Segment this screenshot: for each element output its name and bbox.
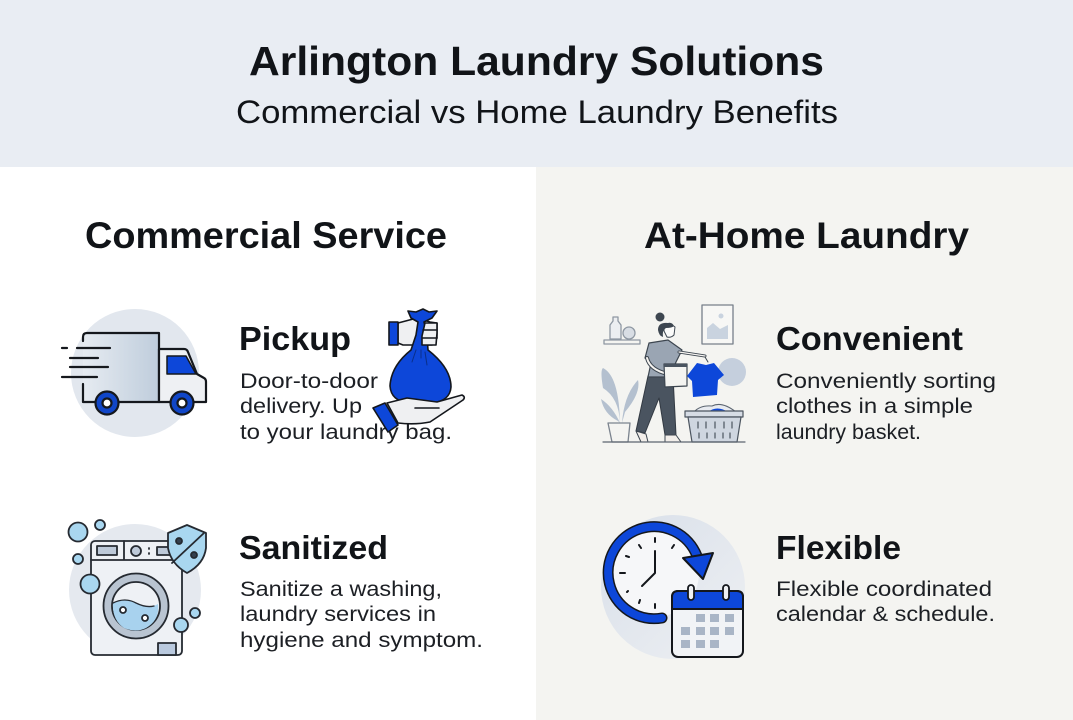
icon: person sorting laundry — [601, 305, 746, 442]
panel: at-home background — [536, 167, 1073, 720]
flexible description: calendar & schedule. — [776, 603, 995, 626]
heading: at-home laundry: At-Home Laundry — [644, 215, 969, 256]
convenient description: clothes in a simple — [776, 395, 973, 418]
flexible description — [776, 578, 995, 626]
text block: pickup — [239, 320, 452, 444]
pickup description: to your laundry bag. — [240, 421, 452, 444]
pickup heading: Pickup — [239, 320, 351, 357]
sanitized description: Sanitize a washing, — [240, 578, 442, 601]
flexible description: Flexible coordinated — [776, 578, 992, 601]
icon: washing machine with shield — [68, 520, 206, 656]
pickup description: Door-to-door — [240, 370, 378, 393]
sanitized description: laundry services in — [240, 603, 436, 626]
flexible heading: Flexible — [776, 529, 901, 566]
text block: convenient — [776, 320, 996, 444]
subtitle: Commercial vs Home Laundry Benefits — [236, 94, 838, 130]
icon: clock and calendar — [601, 515, 745, 659]
convenient heading: Convenient — [776, 320, 963, 357]
pickup description: delivery. Up — [240, 395, 362, 418]
icon: delivery truck — [62, 309, 206, 437]
title: Arlington Laundry Solutions — [249, 38, 824, 84]
pickup description — [240, 370, 452, 444]
text block: flexible — [776, 529, 995, 626]
heading: commercial service: Commercial Service — [85, 215, 447, 256]
convenient description — [776, 370, 996, 444]
sanitized description: hygiene and symptom. — [240, 629, 483, 652]
sanitized description — [240, 578, 483, 652]
header band — [0, 0, 1073, 167]
sanitized heading: Sanitized — [239, 529, 388, 566]
convenient description: Conveniently sorting — [776, 370, 996, 393]
text block: sanitized — [239, 529, 483, 652]
icon: laundry bag held in hands — [373, 309, 464, 432]
convenient description: laundry basket. — [776, 421, 921, 444]
